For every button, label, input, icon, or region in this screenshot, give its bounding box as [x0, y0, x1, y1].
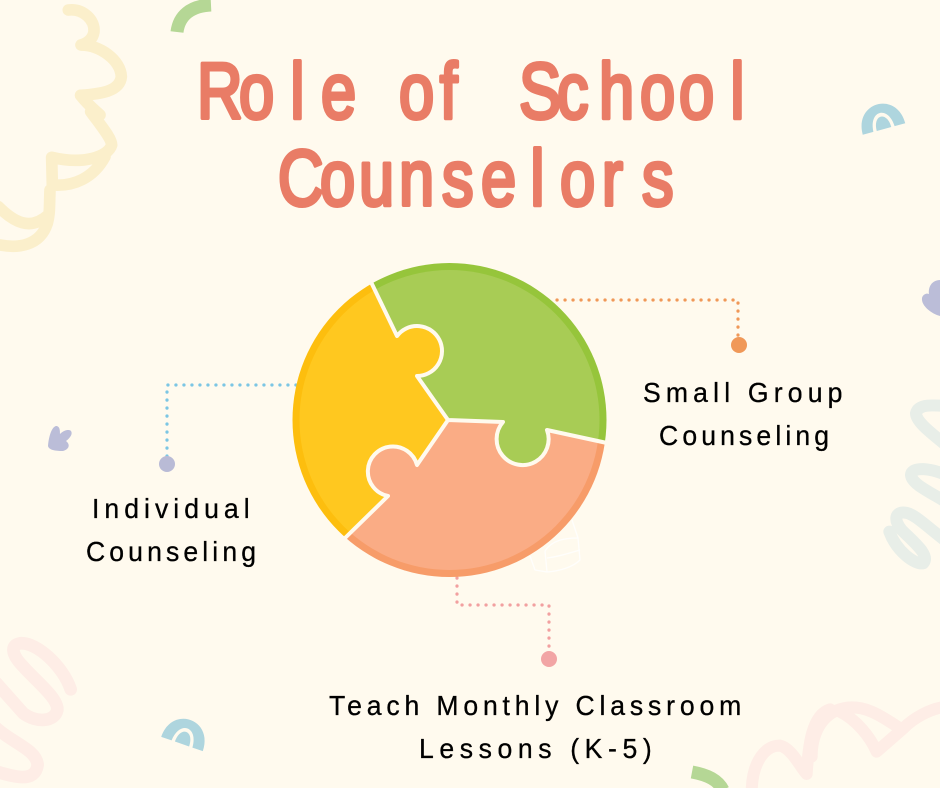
decoration: top right blue arch	[856, 99, 905, 135]
label: small group counseling: Counseling	[659, 419, 829, 451]
title: Role of School	[197, 47, 744, 136]
title	[197, 47, 744, 223]
puzzle piece: salmon	[347, 422, 604, 577]
decoration: top green arch	[177, 5, 211, 32]
scribble: bottom left pink	[0, 643, 71, 777]
label: small group counseling: Small Group	[643, 376, 842, 408]
connector: small group counseling	[557, 300, 747, 353]
scribble: top left yellow	[0, 10, 121, 246]
label: teach monthly classroom lessons: Teach Monthly Classroom	[329, 689, 741, 721]
decoration: bottom green arch	[692, 772, 723, 788]
scribble: bottom right pink	[752, 707, 940, 788]
decoration: bottom left blue arch	[161, 713, 211, 751]
label: small group counseling	[643, 376, 842, 451]
decoration: right lilac leaf	[922, 280, 940, 316]
title: Counselors	[278, 134, 674, 223]
label: individual counseling	[86, 492, 256, 567]
label: teach monthly classroom lessons: Lessons (K-5)	[419, 732, 652, 764]
label: individual counseling: Individual	[92, 492, 250, 524]
connector: classroom lessons	[457, 578, 557, 667]
puzzle piece: green	[374, 263, 606, 464]
puzzle piece: yellow	[292, 284, 446, 536]
scribble: right grey	[889, 405, 940, 563]
connector: individual counseling	[159, 385, 296, 472]
icon: faint backpack sketch	[530, 520, 580, 572]
label: individual counseling: Counseling	[86, 535, 256, 567]
puzzle seams	[344, 282, 607, 539]
label: teach monthly classroom lessons	[329, 689, 741, 764]
decoration: left lilac leaf	[48, 426, 72, 451]
puzzle circle	[292, 263, 607, 577]
